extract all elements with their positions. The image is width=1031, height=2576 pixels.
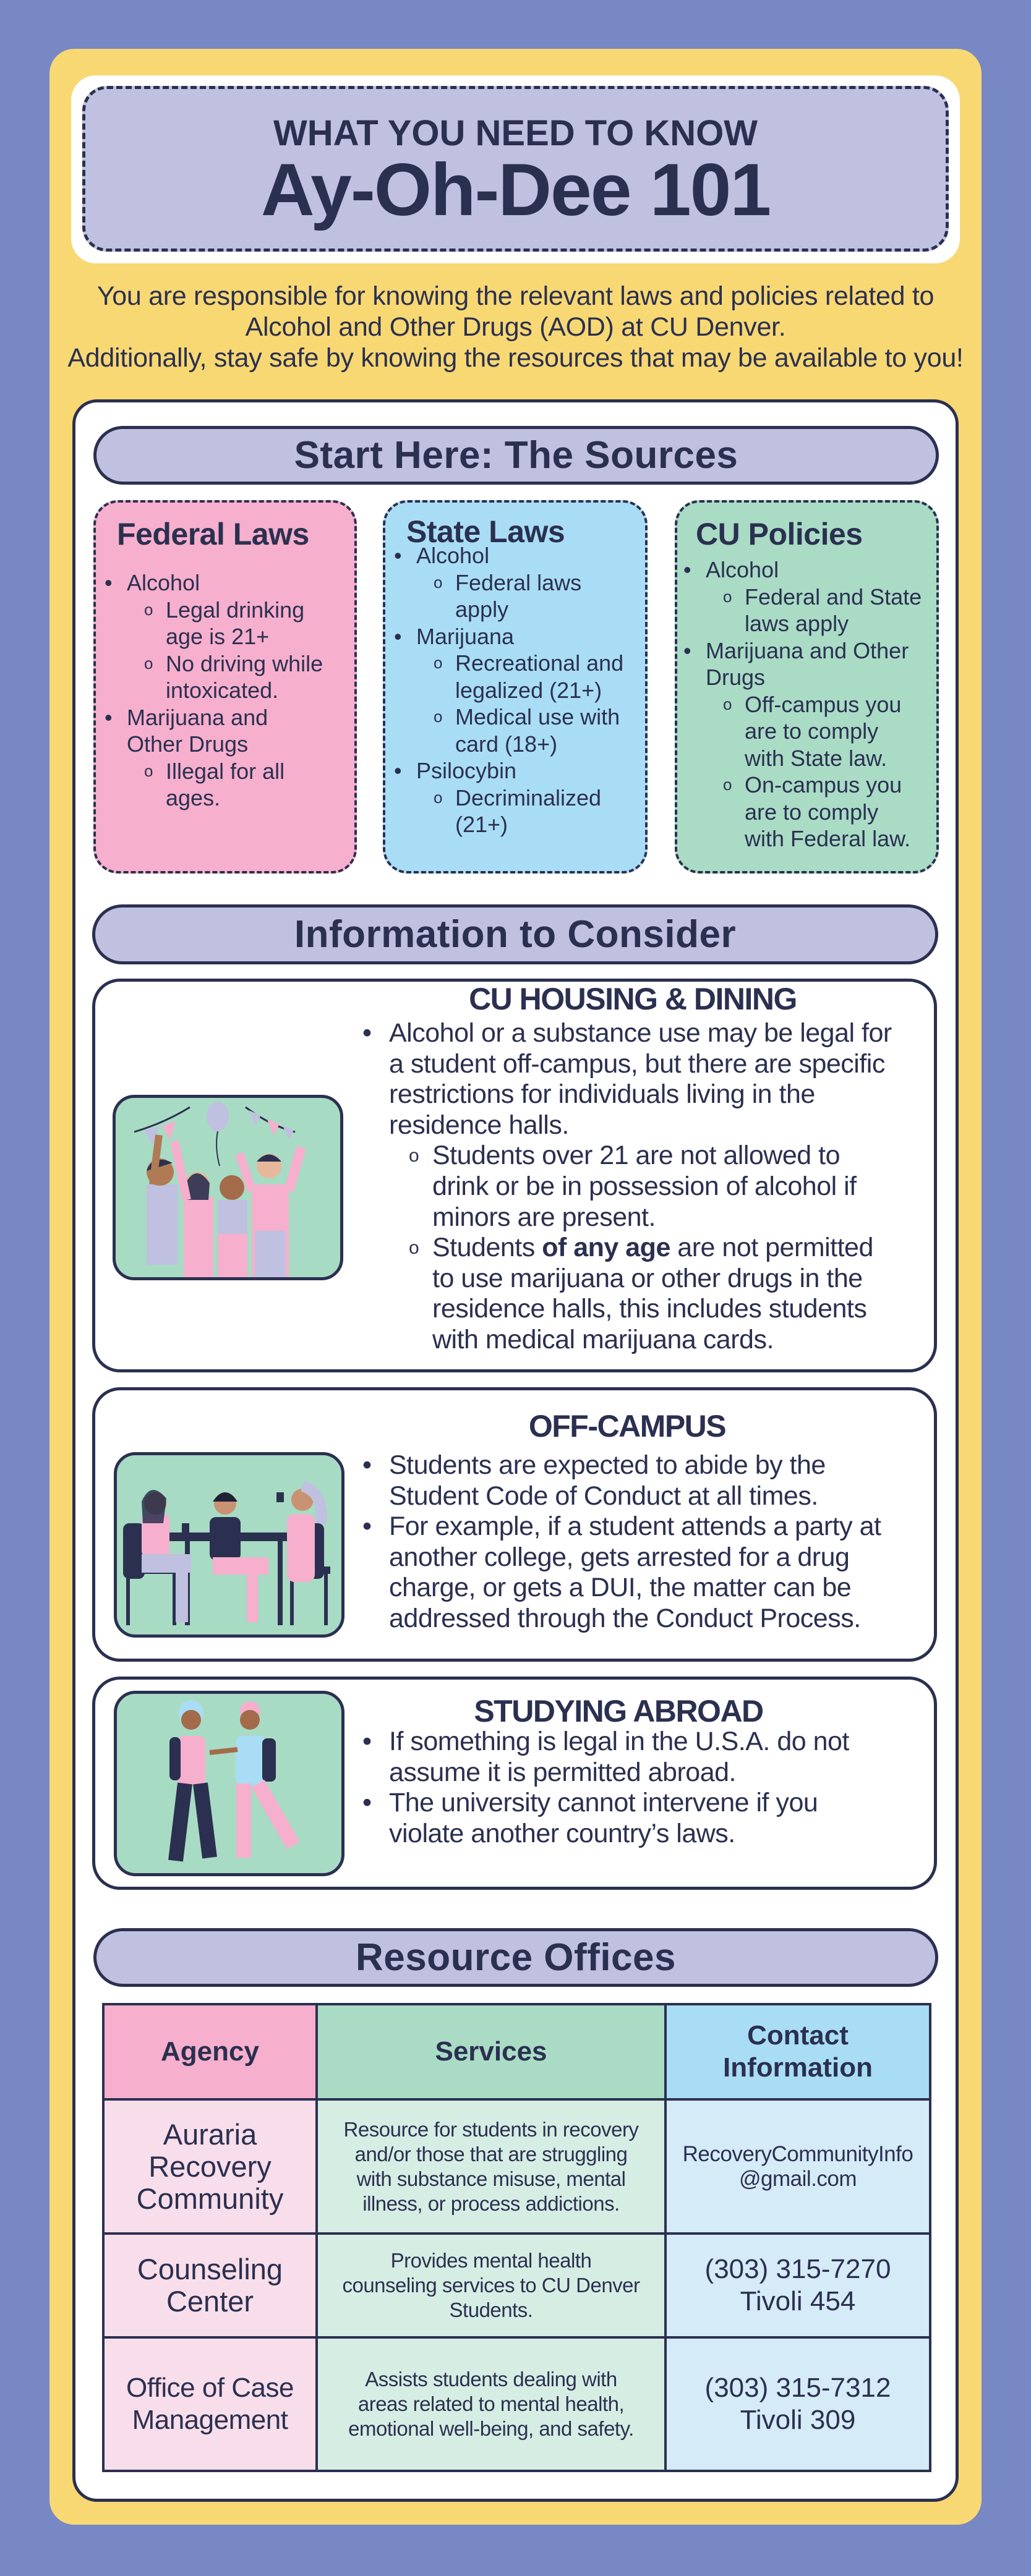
text: housing bullets: residence halls. bbox=[389, 1110, 569, 1140]
table: resource offices: Provides mental health bbox=[391, 2249, 591, 2272]
text: off-campus bullets bbox=[364, 1450, 881, 1633]
heading: federal laws: Federal Laws bbox=[117, 517, 309, 551]
table: resource offices: Recovery bbox=[148, 2150, 272, 2182]
subtitle: WHAT YOU NEED TO KNOW bbox=[273, 113, 758, 153]
text: housing bullets: minors are present. bbox=[432, 1202, 656, 1232]
list: federal: ages. bbox=[166, 785, 220, 810]
list: federal: age is 21+ bbox=[166, 624, 269, 649]
text: off-campus bullets: Students are expected to abide by the bbox=[389, 1450, 826, 1480]
table: resource offices: areas related to mental health, bbox=[358, 2392, 624, 2415]
text: housing bullets: to use marijuana or other drugs in the bbox=[432, 1264, 863, 1293]
table: resource offices: illness, or process addictions. bbox=[362, 2192, 620, 2214]
list: federal bbox=[105, 570, 323, 810]
list: state: Federal laws bbox=[455, 570, 581, 595]
intro text: You are responsible for knowing the relevant laws and policies related to bbox=[97, 281, 934, 311]
list: state: Recreational and bbox=[455, 650, 623, 676]
text: off-campus bullets: addressed through the Conduct Process. bbox=[389, 1604, 861, 1633]
title dashed box bbox=[82, 86, 949, 252]
heading: housing: CU HOUSING & DINING bbox=[469, 982, 797, 1016]
list: CU: with State law. bbox=[745, 746, 887, 770]
list: CU: Off-campus you bbox=[745, 691, 901, 717]
intro text bbox=[67, 281, 964, 373]
table: resource offices: Agency bbox=[161, 2036, 259, 2067]
list: CU: with Federal law. bbox=[745, 826, 910, 851]
text: abroad bullets: The university cannot intervene if you bbox=[389, 1788, 818, 1817]
text: abroad bullets bbox=[364, 1727, 849, 1848]
table: resource offices: and/or those that are struggling bbox=[355, 2143, 627, 2165]
table: resource offices: Students. bbox=[450, 2298, 533, 2321]
table: resource offices: Tivoli 454 bbox=[740, 2286, 855, 2316]
text: abroad bullets: assume it is permitted abroad. bbox=[389, 1758, 736, 1787]
list: CU: On-campus you bbox=[745, 772, 902, 797]
table: resource offices: (303) 315-7312 bbox=[705, 2373, 891, 2403]
table: resource offices: Services bbox=[435, 2036, 547, 2067]
list: CU: Federal and State bbox=[745, 584, 922, 610]
table: resource offices: @gmail.com bbox=[739, 2166, 857, 2191]
title block bbox=[71, 75, 960, 263]
list: CU bbox=[684, 557, 922, 851]
card: studying abroad bbox=[92, 1677, 937, 1890]
panel: federal laws bbox=[93, 500, 357, 874]
heading: off-campus: OFF-CAMPUS bbox=[529, 1409, 725, 1443]
text: abroad bullets: If something is legal in the U.S.A. do not bbox=[389, 1727, 849, 1756]
main title: Ay-Oh-Dee 101 bbox=[261, 148, 770, 231]
list: state: Marijuana bbox=[416, 623, 514, 649]
text: housing bullets: residence halls, this includes students bbox=[432, 1294, 866, 1324]
panel: state laws bbox=[383, 500, 648, 874]
heading: studying abroad: STUDYING ABROAD bbox=[474, 1694, 763, 1728]
icon: party illustration bbox=[113, 1095, 343, 1280]
table: resource offices: Auraria bbox=[163, 2118, 257, 2150]
text: off-campus bullets: another college, gets arrested for a drug bbox=[389, 1542, 849, 1572]
main white panel bbox=[72, 399, 959, 2502]
list: state: (21+) bbox=[455, 812, 508, 837]
table: resource offices: counseling services to CU Denver bbox=[342, 2274, 640, 2297]
card: off-campus bbox=[92, 1387, 937, 1662]
list: state: Medical use with bbox=[455, 704, 620, 729]
text: housing bullets: a student off-campus, but there are specific bbox=[389, 1049, 885, 1079]
table: resource offices: emotional well-being, and safety. bbox=[348, 2417, 634, 2440]
list: state: Decriminalized bbox=[455, 785, 601, 810]
list: federal: No driving while bbox=[166, 650, 323, 676]
text: housing bullets: drink or be in possession of alcohol if bbox=[432, 1171, 857, 1201]
table: resource offices: Office of Case bbox=[126, 2373, 294, 2403]
list: state bbox=[395, 543, 623, 837]
list: federal: Illegal for all bbox=[166, 758, 284, 784]
list: CU: are to comply bbox=[745, 718, 878, 744]
icon: walking students illustration bbox=[114, 1691, 344, 1876]
list: federal: Marijuana and bbox=[127, 705, 268, 729]
heading: Start Here bbox=[93, 426, 939, 485]
icon: friends at table illustration bbox=[114, 1452, 344, 1638]
text: off-campus bullets: charge, or gets a DUI, the matter can be bbox=[389, 1573, 851, 1602]
text: housing bullets: with medical marijuana cards. bbox=[432, 1325, 774, 1354]
text: abroad bullets: violate another country’s laws. bbox=[389, 1819, 735, 1848]
table: resource offices: Center bbox=[166, 2285, 254, 2318]
text: off-campus bullets: Student Code of Conduct at all times. bbox=[389, 1481, 818, 1511]
text: off-campus bullets: For example, if a student attends a party at bbox=[389, 1511, 881, 1541]
heading: Information to Consider bbox=[92, 904, 938, 964]
intro text: Alcohol and Other Drugs (AOD) at CU Denver. bbox=[246, 312, 785, 342]
panel: CU policies bbox=[675, 500, 939, 874]
text: housing bullets: restrictions for individuals living in the bbox=[389, 1079, 815, 1109]
heading: CU policies: CU Policies bbox=[696, 517, 863, 551]
card: housing & dining bbox=[92, 979, 937, 1372]
table: resource offices: RecoveryCommunityInfo bbox=[683, 2141, 913, 2166]
heading: state laws: State Laws bbox=[406, 514, 565, 549]
list: CU: Alcohol bbox=[706, 557, 779, 582]
text: housing bullets: Students over 21 are not allowed to bbox=[432, 1141, 840, 1170]
list: CU: are to comply bbox=[745, 799, 878, 825]
list: federal: Legal drinking bbox=[166, 597, 304, 622]
list: federal: Alcohol bbox=[127, 570, 200, 595]
list: state: apply bbox=[455, 597, 508, 622]
text: housing bullets bbox=[364, 1018, 892, 1354]
table: resource offices: Contact bbox=[747, 2020, 849, 2051]
table: resource offices: Tivoli 309 bbox=[740, 2405, 855, 2435]
table: resource offices: Assists students dealing with bbox=[365, 2368, 617, 2391]
table: resource offices bbox=[102, 2003, 931, 2472]
list: CU: Drugs bbox=[706, 665, 765, 690]
table: resource offices: Management bbox=[132, 2405, 288, 2435]
heading: Information to Consider: Information to Consider bbox=[294, 913, 736, 956]
list: federal: intoxicated. bbox=[166, 678, 278, 703]
list: state: Psilocybin bbox=[416, 758, 516, 783]
list: CU: laws apply bbox=[745, 611, 849, 636]
list: federal: Other Drugs bbox=[127, 731, 248, 757]
list: state: Alcohol bbox=[416, 543, 489, 568]
intro text: Additionally, stay safe by knowing the resources that may be available to you! bbox=[67, 343, 964, 373]
table: resource offices: Community bbox=[137, 2182, 283, 2214]
table: resource offices: Resource for students in recovery bbox=[344, 2118, 638, 2140]
heading: Resource Offices: Resource Offices bbox=[356, 1936, 676, 1979]
table: resource offices: (303) 315-7270 bbox=[705, 2254, 891, 2284]
table: resource offices: Information bbox=[723, 2052, 873, 2083]
list: state: card (18+) bbox=[455, 731, 557, 757]
table: resource offices: with substance misuse, mental bbox=[357, 2167, 625, 2190]
table: resource offices: Counseling bbox=[137, 2253, 283, 2285]
heading: Start Here: Start Here: The Sources bbox=[294, 434, 738, 477]
text: housing bullets: Students of any age are not permitted bbox=[432, 1233, 873, 1262]
list: state: legalized (21+) bbox=[455, 678, 602, 702]
list: CU: Marijuana and Other bbox=[706, 638, 909, 663]
heading: Resource Offices bbox=[93, 1928, 938, 1987]
text: housing bullets: Alcohol or a substance use may be legal for bbox=[389, 1018, 892, 1048]
